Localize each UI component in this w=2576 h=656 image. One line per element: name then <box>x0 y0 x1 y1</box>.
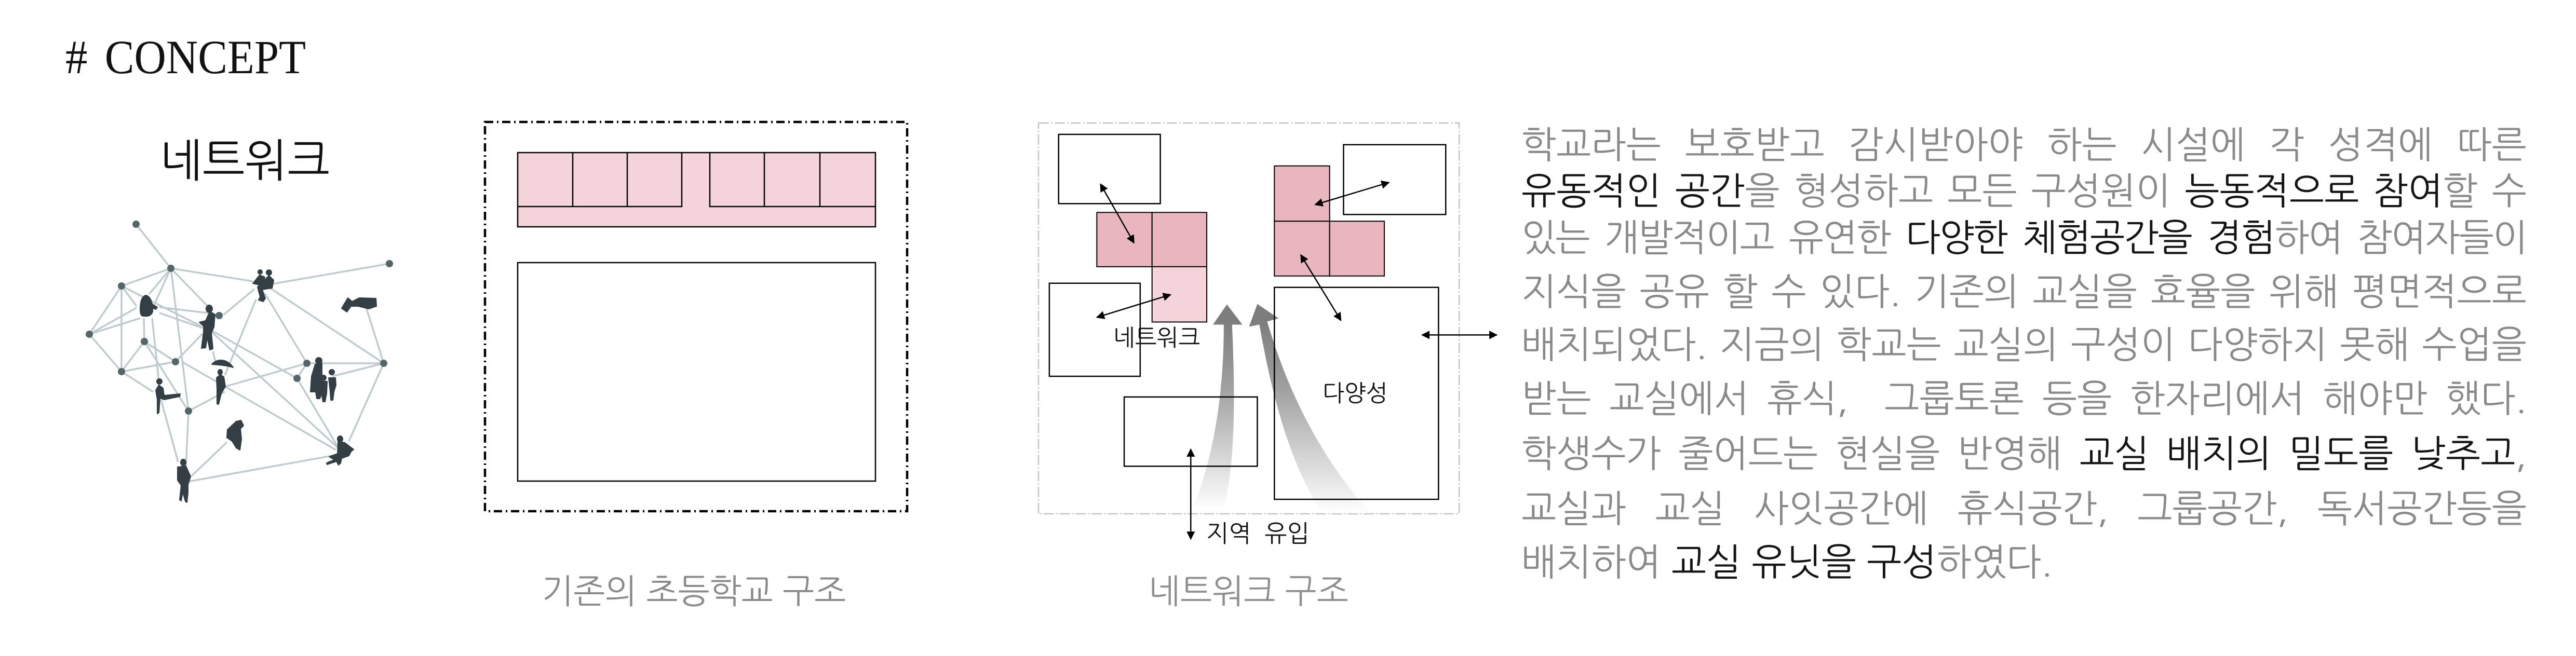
label: community inflow: 지역 유입 <box>1206 522 1310 545</box>
person: seated bottom right <box>327 436 354 465</box>
body text: 배치되었다. 지금의 학교는 교실의 구성이 다양하지 못해 수업을 <box>1521 326 2527 363</box>
inflow arrow right <box>1249 304 1371 513</box>
body text: 학교라는 보호받고 감시받아야 하는 시설에 각 성격에 따른 <box>1521 127 2527 163</box>
person: crouching <box>227 420 244 450</box>
person: standing with arm out <box>199 305 215 350</box>
person: kicking <box>156 379 180 414</box>
white unit boxes <box>1049 134 1446 499</box>
inflow arrow left <box>1193 305 1243 507</box>
person: with umbrella <box>212 360 233 404</box>
person: standing bottom <box>178 459 191 502</box>
label: network: 네트워크 <box>1113 326 1200 349</box>
lower open block <box>518 263 875 481</box>
body text: 교실과 교실 사잇공간에 휴식공간, 그룹공간, 독서공간등을 <box>1521 490 2527 527</box>
connection arrows <box>1097 183 1497 539</box>
network structure diagram <box>1039 123 1497 539</box>
body text: 받는 교실에서 휴식, 그룹토론 등을 한자리에서 해야만 했다. <box>1521 380 2527 417</box>
body text: 있는 개발적이고 유연한 다양한 체험공간을 경험하여 참여자들이 <box>1521 220 2527 256</box>
body text: 지식을 공유 할 수 있다. 기존의 교실을 효율을 위해 평면적으로 <box>1521 274 2527 310</box>
classroom and corridor block <box>518 153 875 227</box>
body text: 배치하여 교실 유닛을 구성하였다. <box>1521 544 2053 581</box>
body text: 유동적인 공간을 형성하고 모든 구성원이 능동적으로 참여할 수 <box>1521 173 2527 210</box>
pink cluster right <box>1274 166 1384 276</box>
person pair: seated top centre <box>253 270 274 302</box>
dashed site boundary <box>485 122 907 511</box>
label: diversity: 다양성 <box>1323 382 1387 405</box>
pink cluster left <box>1097 212 1207 322</box>
body text <box>1521 127 2527 581</box>
person group: seated cluster <box>140 295 157 316</box>
network diagram <box>86 221 393 502</box>
caption: network structure: 네트워크 구조 <box>1149 575 1348 608</box>
heading: network: 네트워크 <box>160 138 330 183</box>
caption: existing school structure: 기존의 초등학교 구조 <box>542 575 846 608</box>
person: lying top right <box>342 298 376 312</box>
dashed site boundary <box>1039 123 1459 514</box>
title: # CONCEPT <box>65 31 306 84</box>
existing school structure diagram <box>485 122 907 511</box>
body text: 학생수가 줄어드는 현실을 반영해 교실 배치의 밀도를 낮추고, <box>1521 435 2527 472</box>
person group: family <box>311 358 336 402</box>
